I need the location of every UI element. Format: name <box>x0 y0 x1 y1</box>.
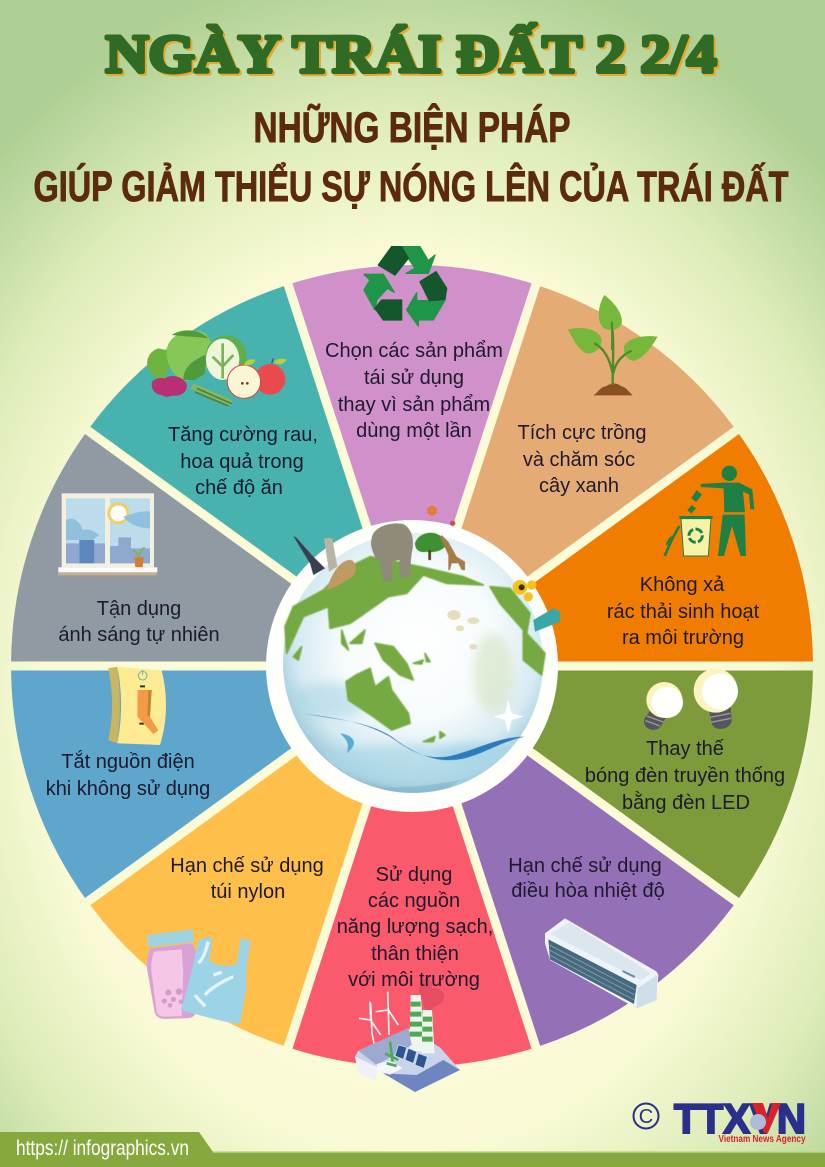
text: reusable products: thay vì sản phẩm <box>338 394 490 416</box>
icon: clean energy factory <box>355 978 460 1092</box>
text: reusable products: Chọn các sản phẩm <box>325 340 503 362</box>
text: reusable products: tái sử dụng <box>364 367 464 389</box>
icon: plant <box>568 295 658 395</box>
text: LED bulbs <box>585 738 785 814</box>
title: NGÀY TRÁI ĐẤT 2 2/4 <box>106 23 716 84</box>
text: clean energy: năng lượng sạch, <box>337 916 493 938</box>
panel: natural light <box>0 428 435 775</box>
lion <box>327 560 356 590</box>
pisa tower <box>324 538 337 572</box>
icon: person and bin <box>665 466 754 556</box>
text: no littering <box>607 574 760 649</box>
logo: TTXVN: TTXVN <box>674 1095 806 1142</box>
text: switch off power: Tắt nguồn điện <box>61 750 195 773</box>
text: clean energy: với môi trường <box>348 969 480 991</box>
text: vegetables <box>168 424 318 499</box>
clouds <box>447 610 479 649</box>
text: air conditioning: Hạn chế sử dụng <box>508 855 662 877</box>
icon: vegetables and fruit <box>147 330 287 406</box>
landscape tree <box>415 533 447 552</box>
text: clean energy <box>337 864 493 991</box>
text: clean energy: thân thiện <box>371 943 459 965</box>
text: LED bulbs: Thay thế <box>646 738 724 760</box>
giraffe <box>440 535 465 570</box>
text: reusable products <box>325 340 503 442</box>
text: vegetables: chế độ ăn <box>195 477 283 499</box>
text: limit nylon bags <box>170 855 324 903</box>
text: natural light <box>58 598 220 646</box>
text: no littering: Không xả <box>640 574 725 596</box>
globe water shading <box>287 633 517 793</box>
text: LED bulbs: bằng đèn LED <box>622 791 750 814</box>
text: air conditioning: điều hòa nhiệt độ <box>511 880 665 902</box>
sunflowers <box>513 580 536 601</box>
panel: switch off power <box>0 557 435 904</box>
text: clean energy: các nguồn <box>368 890 460 912</box>
panel: clean energy <box>292 681 532 1092</box>
text: clean energy: Sử dụng <box>376 864 452 886</box>
logo: TTXVN: Vietnam News Agency <box>718 1134 806 1145</box>
panel: no littering <box>389 428 825 775</box>
text: planting trees: Tích cực trồng <box>518 422 646 444</box>
panel: reusable products <box>292 247 532 651</box>
balloon <box>427 506 437 516</box>
statue <box>533 608 560 632</box>
elephant <box>371 523 413 582</box>
text: planting trees: cây xanh <box>539 475 619 497</box>
text: planting trees: và chăm sóc <box>523 449 635 471</box>
text: LED bulbs: bóng đèn truyền thống <box>585 765 785 787</box>
text: no littering: ra môi trường <box>622 627 744 649</box>
eiffel tower <box>293 536 325 575</box>
water swirl <box>303 713 525 760</box>
icon: power switch <box>108 667 166 745</box>
panel: LED bulbs <box>389 557 825 904</box>
text: reusable products: dùng một lần <box>356 420 472 442</box>
title: NGÀY TRÁI ĐẤT 2 2/4 <box>108 25 718 86</box>
flare <box>493 700 523 733</box>
globe <box>266 506 560 812</box>
icon: air conditioner <box>545 918 658 1008</box>
icon: window <box>58 493 157 575</box>
subtitle: NHỮNG BIỆN PHÁP <box>254 103 570 152</box>
panel: limit nylon bags <box>80 608 500 1061</box>
continents <box>285 557 545 742</box>
text: air conditioning <box>508 855 665 902</box>
text: planting trees <box>518 422 646 497</box>
copyright symbol: C <box>639 1106 653 1128</box>
panel: vegetables and fruit <box>80 271 500 724</box>
panel: planting trees <box>324 271 744 724</box>
copyright symbol <box>634 1104 658 1128</box>
footer bar <box>0 1132 825 1167</box>
icon: recycle <box>364 247 447 326</box>
footer url: https:// infographics.vn <box>16 1137 189 1160</box>
icon: light bulbs <box>644 669 738 730</box>
text: natural light: ánh sáng tự nhiên <box>58 624 220 646</box>
text: vegetables: Tăng cường rau, <box>168 424 318 446</box>
subtitle <box>34 103 788 211</box>
icon: jar and plastic bag <box>147 929 251 1024</box>
text: no littering: rác thải sinh hoạt <box>607 601 760 623</box>
text: vegetables: hoa quả trong <box>180 451 304 473</box>
text: switch off power <box>46 750 210 800</box>
text: limit nylon bags: túi nylon <box>211 881 285 903</box>
text: natural light: Tận dụng <box>97 598 181 620</box>
text: limit nylon bags: Hạn chế sử dụng <box>170 855 324 877</box>
panel: air conditioning <box>324 608 744 1061</box>
text: switch off power: khi không sử dụng <box>46 778 210 800</box>
